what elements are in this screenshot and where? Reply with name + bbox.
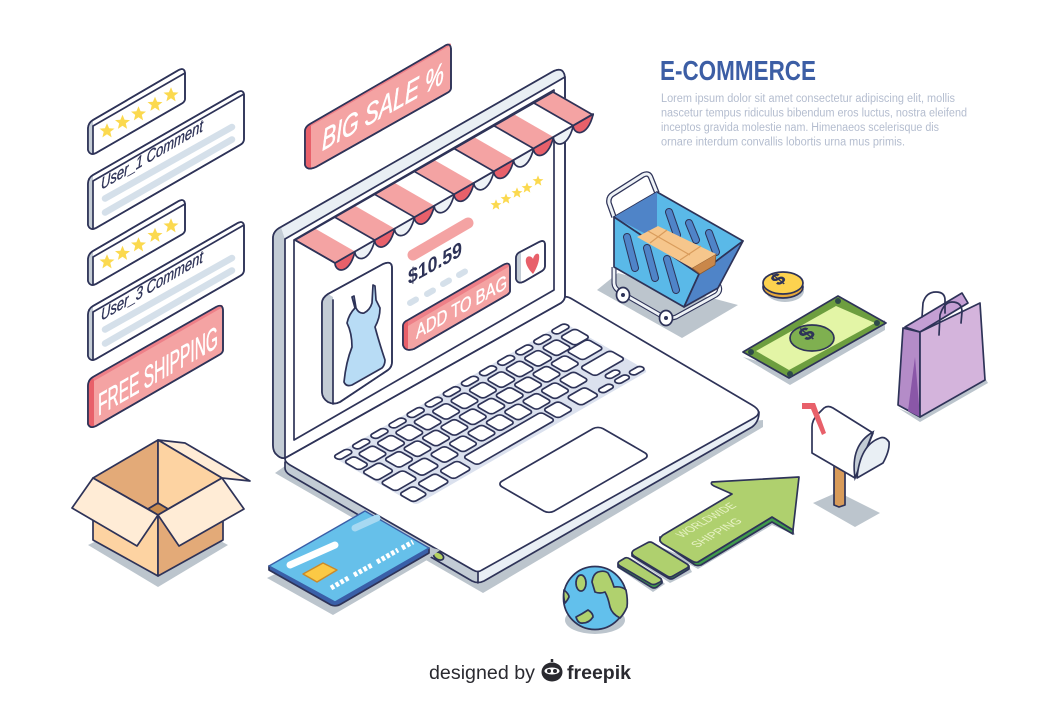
panel: user 1 comment: User_1 Comment <box>101 115 204 194</box>
icon: dress <box>344 285 385 386</box>
description text: ornare interdum convallis lobortis urna mus primis. <box>661 136 905 148</box>
arrow: worldwide shipping: WORLDWIDE <box>672 501 740 539</box>
cart basket <box>614 192 743 274</box>
card chip <box>303 563 337 582</box>
trackpad <box>497 426 650 514</box>
footer credit: freepik <box>567 662 631 684</box>
description text <box>661 93 967 148</box>
arrow dash large <box>632 542 692 583</box>
price: $10.59 <box>408 237 462 290</box>
dollar banknote <box>743 296 886 385</box>
mailbox flag <box>802 403 826 435</box>
coin <box>763 269 804 302</box>
dollar banknote: $ <box>794 324 820 345</box>
description text: Lorem ipsum dolor sit amet consectetur adipiscing elit, mollis <box>661 93 955 105</box>
shopping bag <box>898 292 988 422</box>
globe <box>564 566 627 634</box>
credit card <box>267 511 440 615</box>
add to bag button <box>403 263 510 350</box>
panel: user 1 comment <box>88 91 244 229</box>
banner: free shipping <box>88 305 223 428</box>
add to bag button: ADD TO BAG <box>416 270 507 344</box>
shopping cart <box>597 174 743 338</box>
laptop shadow <box>275 420 763 593</box>
open cardboard box <box>72 440 250 587</box>
screen <box>294 90 554 440</box>
arrow dash small <box>618 558 665 592</box>
cart handle <box>609 174 657 217</box>
arrow: worldwide shipping: SHIPPING <box>687 516 746 549</box>
product card with dress <box>322 263 392 404</box>
stars on screen <box>491 175 543 210</box>
laptop base <box>285 297 759 584</box>
favourite heart card <box>516 241 545 283</box>
title: E-COMMERCE <box>660 55 816 86</box>
panel: user 3 comment: User_3 Comment <box>101 246 204 325</box>
price dots <box>410 272 465 303</box>
banner: free shipping: FREE SHIPPING <box>98 320 218 423</box>
boxes in cart <box>692 254 716 274</box>
product name bar <box>413 223 468 255</box>
description text: inceptos gravida molestie nam. Himenaeos scelerisque dis <box>661 122 939 134</box>
footer credit: designed by <box>429 662 535 684</box>
laptop <box>273 69 763 593</box>
mailbox <box>802 403 889 527</box>
shop awning <box>295 91 593 270</box>
panel: user 3 comment <box>88 222 244 360</box>
panel: star rating 1 <box>88 69 185 154</box>
keyboard <box>332 322 649 505</box>
footer credit <box>429 659 631 684</box>
status light <box>432 550 445 562</box>
arrow: worldwide shipping <box>655 477 799 569</box>
icon: freepik robot <box>542 659 562 682</box>
laptop lid <box>273 69 565 458</box>
cart frame and wheels <box>614 267 720 318</box>
banner: big sale: BIG SALE % <box>322 56 444 158</box>
description text: nascetur tempus ridiculus bibendum eros luctus, nostra eleifend <box>661 108 967 120</box>
coin: $ <box>766 269 790 289</box>
arrow shadow <box>655 517 795 569</box>
panel: star rating 2 <box>88 200 185 285</box>
banner: big sale <box>305 43 451 169</box>
